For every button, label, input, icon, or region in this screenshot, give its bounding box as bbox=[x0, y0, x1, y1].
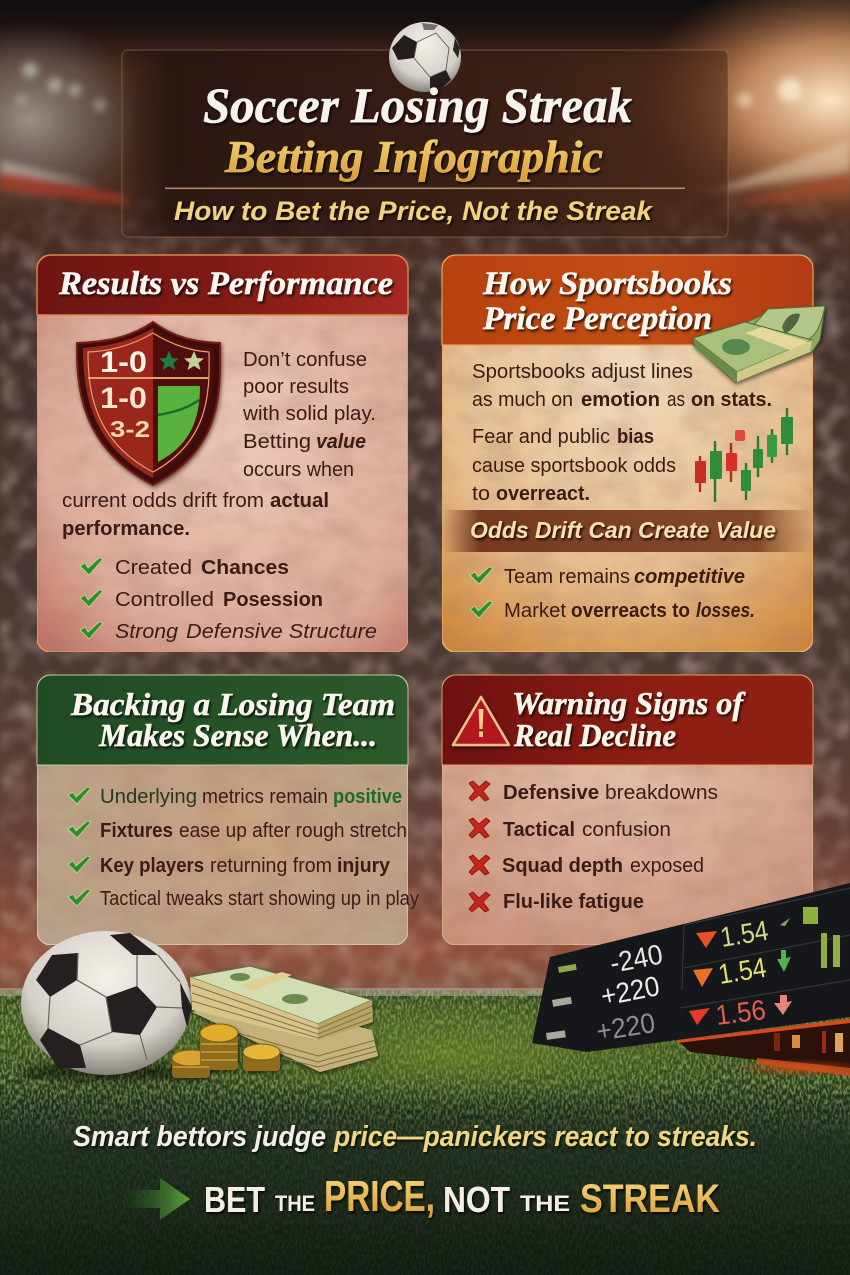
checklist: positive bbox=[333, 786, 402, 808]
intro text bbox=[62, 349, 376, 540]
call to action: THE bbox=[275, 1191, 315, 1216]
body text: to bbox=[472, 483, 490, 505]
icon: soccer ball top bbox=[389, 22, 461, 92]
panel body bbox=[37, 255, 408, 652]
panel body bbox=[442, 255, 813, 652]
warning list: exposed bbox=[630, 855, 704, 877]
title divider bbox=[165, 188, 685, 189]
heading bbox=[482, 266, 732, 337]
icon: cash stack bbox=[693, 306, 825, 382]
body text: overreact. bbox=[496, 483, 590, 505]
checklist: Created bbox=[115, 557, 192, 579]
odds board: 1.54 bbox=[718, 915, 770, 953]
heading: How Sportsbooks bbox=[482, 266, 732, 302]
intro text: actual bbox=[270, 490, 329, 512]
checklist: returning from bbox=[210, 855, 332, 877]
panel header bar bbox=[442, 675, 813, 765]
body text bbox=[472, 361, 772, 505]
footer tagline bbox=[73, 1121, 757, 1153]
intro text: value bbox=[316, 431, 366, 453]
call to action: BET bbox=[204, 1179, 265, 1220]
title line 1: Soccer Losing Streak bbox=[203, 77, 632, 133]
panel: results vs performance bbox=[37, 255, 408, 652]
stadium background bbox=[0, 0, 850, 1000]
checklist bbox=[80, 557, 377, 643]
panel: warning signs bbox=[442, 675, 813, 945]
odds board: +220 bbox=[594, 1007, 657, 1047]
odds board: 1.56 bbox=[714, 994, 767, 1031]
body text: cause sportsbook odds bbox=[472, 455, 676, 477]
icon: gold coins bbox=[172, 1024, 280, 1078]
checklist: Chances bbox=[201, 557, 289, 579]
heading: Warning Signs of bbox=[512, 685, 746, 721]
checklist: ease up after rough stretch bbox=[179, 820, 407, 842]
icon: score shield bbox=[77, 322, 220, 485]
odds board: +220 bbox=[598, 970, 662, 1012]
intro text: poor results bbox=[243, 376, 349, 398]
intro text: current odds drift from bbox=[62, 490, 264, 512]
panel: title bbox=[122, 22, 728, 237]
heading: Results vs Performance bbox=[58, 266, 393, 302]
panel: backing a losing team bbox=[37, 675, 419, 945]
body text: as much on bbox=[472, 389, 573, 411]
icon: warning triangle bbox=[453, 697, 509, 745]
grass pitch bbox=[0, 988, 850, 1275]
warning list: Defensive bbox=[503, 782, 599, 804]
footer tagline: Smart bettors judge bbox=[73, 1121, 326, 1153]
checklist: overreacts to bbox=[571, 600, 690, 622]
title backing bbox=[122, 50, 728, 237]
call to action bbox=[204, 1172, 720, 1221]
checklist: Key players bbox=[100, 855, 204, 877]
sub-banner: Odds Drift Can Create Value bbox=[470, 517, 776, 543]
checklist: injury bbox=[337, 855, 391, 877]
heading: Price Perception bbox=[482, 301, 712, 337]
checklist: Underlying bbox=[100, 786, 197, 808]
heading bbox=[70, 686, 395, 753]
warning list: breakdowns bbox=[605, 782, 718, 804]
chart: candlesticks bbox=[695, 408, 793, 502]
call to action: STREAK bbox=[580, 1177, 720, 1221]
subtitle: How to Bet the Price, Not the Streak bbox=[174, 196, 654, 226]
panel: how sportsbooks price perception bbox=[442, 255, 825, 652]
warning list: Squad depth bbox=[502, 855, 623, 877]
odds board: 1.54 bbox=[716, 952, 768, 990]
warning list bbox=[469, 781, 718, 913]
warning list: Flu-like fatigue bbox=[503, 891, 644, 913]
checklist: Team remains bbox=[504, 566, 630, 588]
icon: money stacks bbox=[190, 966, 378, 1072]
checklist bbox=[68, 786, 419, 910]
body text: Fear and public bbox=[472, 426, 610, 448]
icon: score shield: 1-0 bbox=[100, 382, 147, 415]
checklist: Market bbox=[504, 600, 566, 622]
footer tagline: price—panickers react to streaks. bbox=[333, 1121, 757, 1153]
warning list: confusion bbox=[582, 819, 671, 841]
odds board: -240 bbox=[607, 938, 665, 979]
heading: Makes Sense When... bbox=[98, 717, 377, 753]
call to action: NOT bbox=[443, 1179, 510, 1220]
checklist bbox=[470, 566, 755, 622]
checklist: Controlled bbox=[115, 589, 214, 611]
body text: as bbox=[667, 389, 685, 411]
icon: soccer ball large bbox=[18, 931, 198, 1081]
heading: Real Decline bbox=[513, 717, 676, 753]
title line 2: Betting Infographic bbox=[224, 132, 603, 182]
checklist: metrics remain bbox=[202, 786, 328, 808]
body text: on stats. bbox=[691, 389, 772, 411]
call to action: PRICE, bbox=[324, 1172, 435, 1221]
panel body bbox=[442, 675, 813, 945]
body text: Sportsbooks adjust lines bbox=[472, 361, 693, 383]
icon: green arrow bbox=[122, 1178, 190, 1220]
checklist: Posession bbox=[223, 589, 323, 611]
heading: Backing a Losing Team bbox=[70, 686, 395, 722]
intro text: Don’t confuse bbox=[243, 349, 367, 371]
checklist: Tactical tweaks start showing up in play bbox=[100, 888, 419, 910]
body text: emotion bbox=[581, 389, 660, 411]
odds board bbox=[532, 883, 850, 1077]
checklist: losses. bbox=[696, 600, 755, 622]
icon: score shield: 3-2 bbox=[110, 416, 150, 442]
intro text: occurs when bbox=[243, 459, 354, 481]
body text: bias bbox=[617, 426, 654, 448]
checklist: Strong bbox=[115, 621, 178, 643]
intro text: performance. bbox=[62, 518, 190, 540]
warning list: Tactical bbox=[503, 819, 575, 841]
panel header bar bbox=[442, 255, 813, 345]
panel header bar bbox=[37, 255, 408, 315]
intro text: Betting bbox=[243, 431, 311, 453]
panel body bbox=[37, 675, 408, 945]
heading bbox=[512, 685, 746, 753]
panel header bar bbox=[37, 675, 408, 765]
checklist: competitive bbox=[634, 566, 745, 588]
call to action: THE bbox=[520, 1191, 570, 1216]
checklist: Defensive Structure bbox=[186, 621, 377, 643]
icon: score shield: 1-0 bbox=[100, 346, 147, 379]
intro text: with solid play. bbox=[242, 403, 376, 425]
checklist: Fixtures bbox=[100, 820, 173, 842]
sub-banner bbox=[443, 510, 812, 552]
